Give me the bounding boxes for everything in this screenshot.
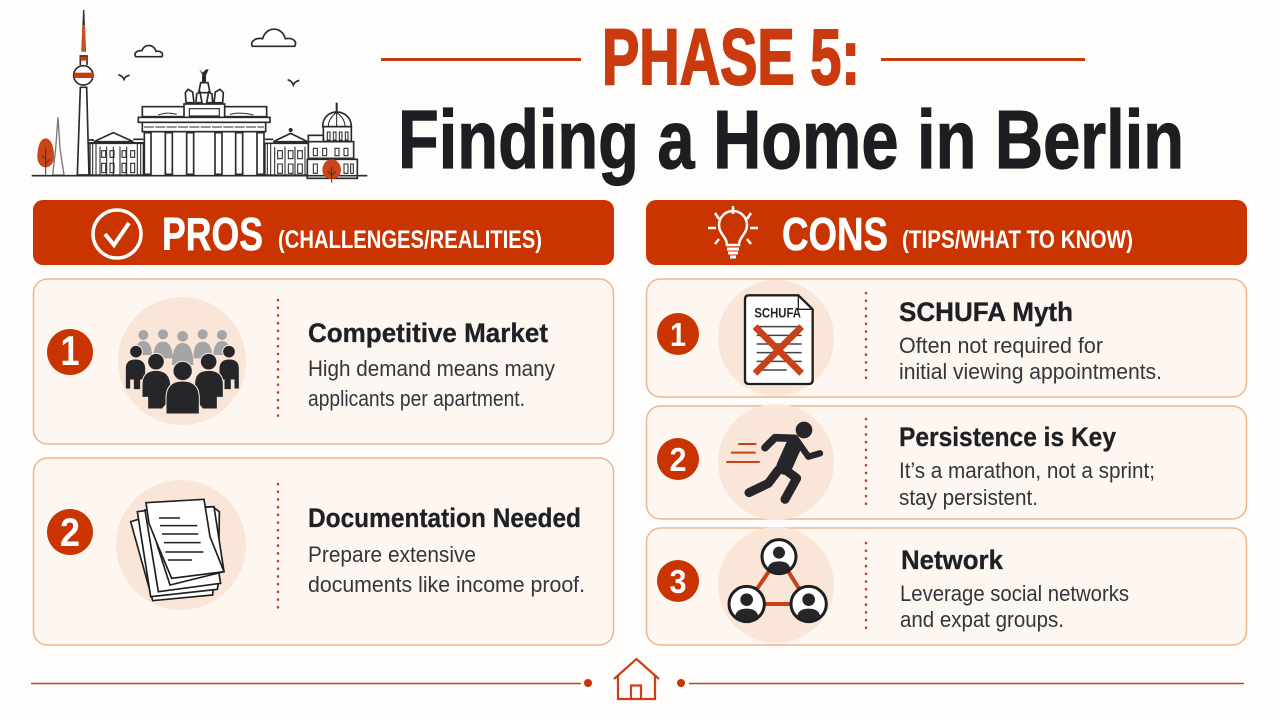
- heading: pros: PROS: [162, 208, 263, 260]
- badge: number 1: 1: [60, 327, 80, 374]
- icon: stack of documents: [116, 480, 246, 610]
- decorative dotted divider: [277, 300, 279, 422]
- text: competitive market description: applicants per apartment.: [308, 386, 525, 411]
- heading: schufa myth: SCHUFA Myth: [899, 297, 1073, 327]
- text: persistence description: stay persistent.: [899, 485, 1038, 510]
- heading: network: Network: [901, 545, 1004, 575]
- text: network description: [900, 581, 1129, 632]
- heading: documentation needed: Documentation Needed: [308, 503, 581, 533]
- heading: persistence is key: Persistence is Key: [899, 422, 1116, 452]
- decorative dotted divider: [277, 484, 279, 612]
- icon: schufa document crossed out: SCHUFA: [754, 304, 801, 320]
- heading: cons: CONS: [782, 208, 888, 260]
- decorative dotted divider: [865, 293, 867, 383]
- icon: orange tree right: [322, 159, 341, 183]
- badge: number 2: 2: [60, 511, 80, 555]
- text: documentation description: documents like income proof.: [308, 572, 585, 597]
- footer ornament: [31, 659, 1244, 699]
- icon: people network: [718, 527, 834, 643]
- text: documentation description: Prepare extensive: [308, 542, 476, 567]
- icon: runner: [718, 404, 834, 520]
- icon: schufa document crossed out: [718, 280, 834, 396]
- icon: birds: [118, 75, 299, 85]
- badge: number 1: [47, 327, 93, 375]
- text: schufa description: initial viewing appointments.: [899, 359, 1162, 384]
- panel: network: [646, 527, 1246, 645]
- panel: persistence is key: [646, 404, 1246, 520]
- title: [398, 12, 1184, 186]
- icon: house: [614, 659, 659, 699]
- text: network description: Leverage social networks: [900, 581, 1129, 606]
- illustration: Berlin skyline: [32, 10, 367, 183]
- icon: large cloud: [252, 29, 295, 46]
- text: persistence description: [899, 458, 1155, 510]
- decorative dotted divider: [865, 419, 867, 505]
- heading: Phase 5: PHASE 5:: [602, 12, 860, 101]
- icon: crowd: [118, 297, 246, 425]
- text: documentation description: [308, 542, 585, 597]
- text: pros subtitle: (CHALLENGES/REALITIES): [278, 226, 542, 254]
- panel: schufa myth: [646, 279, 1246, 397]
- text: schufa description: [899, 333, 1162, 384]
- badge: number 3: 3: [670, 563, 686, 600]
- text: cons subtitle: (TIPS/WHAT TO KNOW): [902, 226, 1133, 254]
- panel: pros header: [33, 200, 614, 265]
- panel: competitive market: [34, 279, 614, 444]
- badge: number 2: 2: [670, 441, 686, 478]
- badge: number 2: [47, 509, 93, 555]
- icon: church spire: [53, 117, 64, 175]
- badge: number 1: 1: [670, 316, 686, 353]
- text: schufa description: Often not required for: [899, 333, 1103, 358]
- panel: cons header: [646, 200, 1247, 265]
- text: competitive market description: High demand means many: [308, 356, 555, 381]
- text: competitive market description: [308, 356, 555, 411]
- decorative dotted divider: [865, 543, 867, 630]
- icon: light bulb: [708, 206, 758, 257]
- icon: small cloud: [135, 45, 162, 57]
- text: network description: and expat groups.: [900, 607, 1064, 632]
- badge: number 3: [657, 560, 699, 602]
- panel: documentation needed: [34, 458, 614, 645]
- heading: competitive market: Competitive Market: [308, 318, 548, 348]
- icon: Brandenburg Gate: [138, 69, 270, 174]
- text: persistence description: It’s a marathon, not a sprint;: [899, 458, 1155, 483]
- icon: left neoclassical building: [89, 133, 143, 175]
- icon: right neoclassical building: [265, 128, 308, 175]
- decorative ground line: [32, 173, 367, 178]
- badge: number 2: [657, 438, 699, 480]
- icon: TV tower: [74, 10, 93, 175]
- icon: check circle: [93, 210, 141, 258]
- badge: number 1: [657, 313, 699, 355]
- icon: domed building: [307, 103, 357, 178]
- icon: orange tree left: [37, 138, 54, 175]
